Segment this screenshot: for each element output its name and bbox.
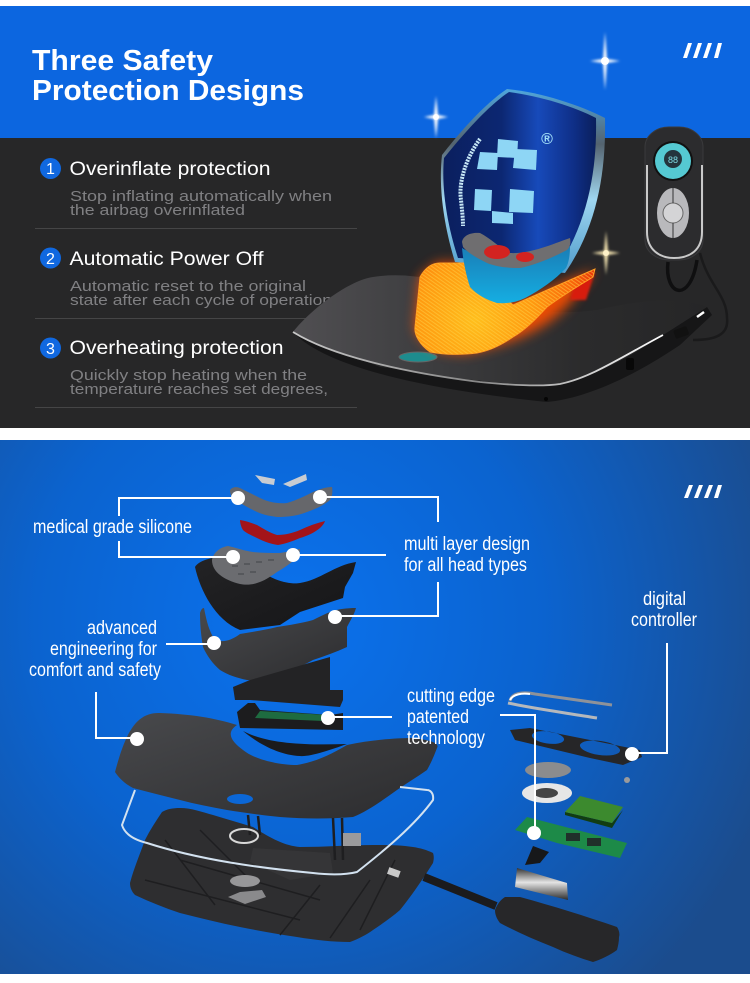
callout: advanced engineering [29,618,221,746]
top plate [115,713,438,818]
metal parts in base [228,829,401,904]
callout: cutting edge patented technology: technology [407,728,485,749]
silicone pad [212,546,300,585]
air box [233,657,343,707]
registered mark: ® [541,131,553,148]
feature 2: automatic power off [40,248,332,309]
callout: advanced engineering: advanced [87,618,157,639]
dark arc in cutout [243,731,347,756]
silicone top layer [230,487,332,517]
feature 2: automatic power off: Automatic Power Off [70,249,264,270]
callout: cutting edge patented technology: cutting edge [407,686,495,707]
feature 3: overheating protection [40,338,328,398]
badge 1 [40,158,61,179]
callout: advanced engineering: comfort and safety [29,660,161,681]
feature 1: overinflate protection: Overinflate protection [70,159,270,180]
panel: exploded view [0,440,750,974]
title [32,45,304,107]
remote control: 88 [668,155,678,165]
callout: multi layer design: multi layer design [404,534,530,555]
callout: medical grade silicone [33,491,245,564]
silver diaphragm [522,783,572,803]
callout: cutting edge patented technology: patented [407,707,469,728]
title: Three Safety [32,45,213,77]
base shell [130,808,434,942]
icon: star sparkle lower [592,231,620,275]
chips [566,833,601,846]
spine [460,139,480,226]
callout: digital controller: digital [643,589,686,610]
black clip [525,846,549,865]
exploded parts: controller [508,693,642,900]
feature 3: overheating protection: Quickly stop heating when the [70,367,307,384]
callout: multi layer design [286,490,530,624]
callout: digital controller: controller [631,610,698,631]
callout: multi layer design: for all head types [404,555,527,576]
callout: cutting edge patented technology [321,686,541,840]
controller bottom case [495,897,619,962]
motor cylinder [515,868,568,900]
metal ring [122,787,433,874]
red layer [240,520,325,545]
icon: star sparkle left [424,96,448,138]
raised block [250,848,333,880]
badge 3 [40,338,61,358]
feature 3: overheating protection: temperature reaches set degrees, [70,381,328,398]
green display [565,796,623,828]
heating pad glow [415,263,595,353]
callout: medical grade silicone: medical grade silicone [33,517,192,538]
feature 2: automatic power off: state after each cycle of operation [70,292,332,309]
small screw [624,777,630,783]
disc [525,762,571,778]
feature 2: automatic power off: Automatic reset to the original [70,278,306,295]
feature 3: overheating protection: Overheating protection [70,338,284,359]
base plate [293,275,712,402]
cable [424,877,496,906]
circuit board [515,817,627,858]
badge 3: 3 [46,341,55,358]
metal clips [255,474,307,487]
controller frame [510,728,642,765]
product illustration: neck massager with shield [293,89,727,402]
dark cushion upper [195,557,356,630]
badge 2: 2 [46,251,55,268]
circuit tray [237,703,343,730]
base ribs [145,830,395,938]
panel: safety protection designs [0,6,750,428]
callout: digital controller [625,589,698,761]
support pins [248,815,343,860]
badge 1: 1 [46,161,55,178]
neck support [462,233,570,303]
feature 1: overinflate protection: the airbag overinflated [70,202,245,219]
heating pad [415,263,595,354]
feature 1: overinflate protection: Stop inflating automatically when [70,188,332,205]
icon: star sparkle top [590,32,620,90]
remote control [645,127,727,340]
dark cushion lower [200,608,356,680]
exploded parts: base assembly [115,713,619,962]
title: Protection Designs [32,75,304,107]
shield [441,89,605,273]
badge 2 [40,248,61,268]
callout: advanced engineering: engineering for [50,639,158,660]
feature 1: overinflate protection [40,158,332,219]
logo squares [474,139,537,224]
icon: slash marks [684,485,722,498]
exploded parts: head cradle stack [195,474,356,730]
icon: slash marks [683,43,722,58]
metal trim [508,693,612,718]
